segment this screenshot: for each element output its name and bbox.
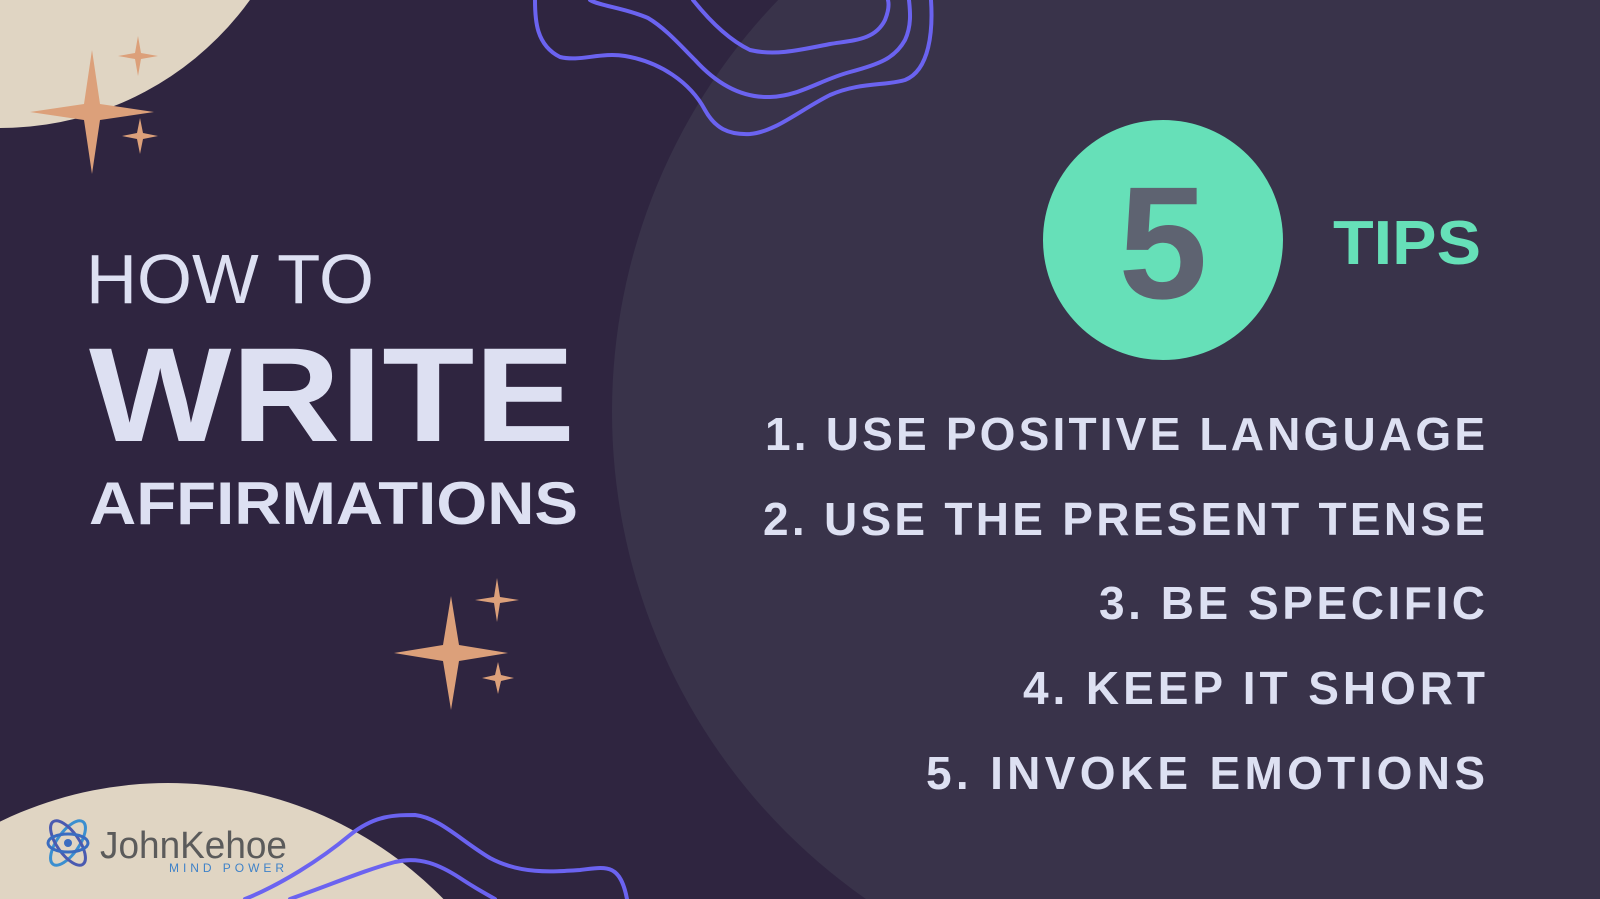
logo: JohnKehoe Mind Power: JohnKehoe	[100, 825, 287, 867]
icon: star cluster top-left	[30, 36, 158, 174]
icon: wavy lines bottom	[245, 815, 627, 899]
logo: JohnKehoe Mind Power	[44, 815, 287, 875]
decorative beige top-left	[0, 0, 308, 128]
title: AFFIRMATIONS	[89, 470, 578, 537]
icon: atom	[44, 815, 92, 871]
icon: star cluster middle	[394, 578, 519, 710]
list: tips: 2. USE THE PRESENT TENSE	[763, 493, 1485, 545]
list: tips: 4. KEEP IT SHORT	[1023, 662, 1485, 714]
title	[86, 240, 578, 537]
title: HOW TO	[86, 240, 374, 318]
heading: TIPS: TIPS	[1333, 209, 1481, 278]
title: WRITE	[89, 321, 575, 470]
list: tips	[763, 408, 1485, 799]
list: tips: 3. BE SPECIFIC	[1099, 577, 1485, 629]
badge: 5 circle: 5	[1119, 153, 1207, 332]
badge: 5 circle	[1043, 120, 1283, 360]
list: tips: 5. INVOKE EMOTIONS	[926, 747, 1485, 799]
logo: JohnKehoe Mind Power: MIND POWER	[169, 861, 287, 875]
decorative beige bottom-left	[0, 783, 553, 899]
icon: wavy lines top	[535, 0, 932, 134]
panel: right lighter circle	[612, 0, 1600, 899]
list: tips: 1. USE POSITIVE LANGUAGE	[765, 408, 1485, 460]
